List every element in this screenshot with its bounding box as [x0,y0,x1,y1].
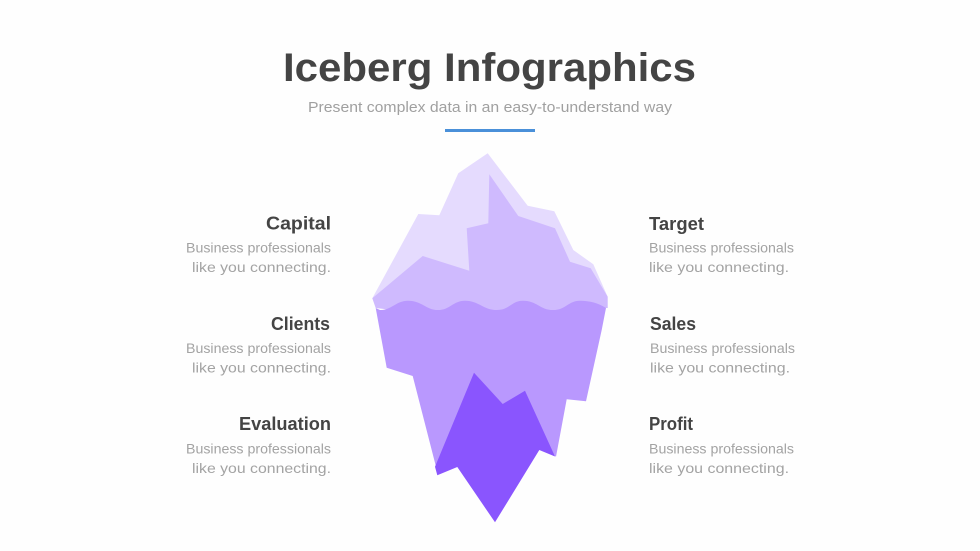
item: Capital [186,214,331,275]
item: Target: like you connecting. [649,259,789,275]
item: Clients [186,314,331,376]
item: Target: Target [649,214,704,234]
iceberg [372,153,608,522]
iceberg: mid peak [372,174,608,313]
item: Clients: Business professionals [186,340,331,356]
item: Sales: like you connecting. [650,360,790,376]
subtitle: Present complex data in an easy-to-understand way [308,99,673,116]
item: Clients: like you connecting. [192,360,331,376]
item: Target [649,214,794,275]
item: Sales: Sales [650,314,696,334]
iceberg: underwater body [376,301,606,467]
item: Sales: Business professionals [650,340,795,356]
item: Profit: Profit [649,414,693,434]
item: Evaluation: Evaluation [239,414,331,434]
item: Sales [650,314,795,376]
item: Evaluation: Business professionals [186,440,331,456]
item: Profit: like you connecting. [649,460,789,476]
title: Iceberg Infographics [283,46,696,90]
item: Evaluation [186,414,331,476]
item: Capital: Capital [266,214,331,234]
item: Profit [649,414,794,476]
title underline [445,129,535,132]
item: Evaluation: like you connecting. [192,460,331,476]
item: Capital: like you connecting. [192,259,331,275]
iceberg: light peak [372,153,608,298]
item: Profit: Business professionals [649,440,794,456]
item: Target: Business professionals [649,240,794,256]
iceberg: deep core [435,373,555,522]
item: Capital: Business professionals [186,240,331,256]
item: Clients: Clients [271,314,330,334]
